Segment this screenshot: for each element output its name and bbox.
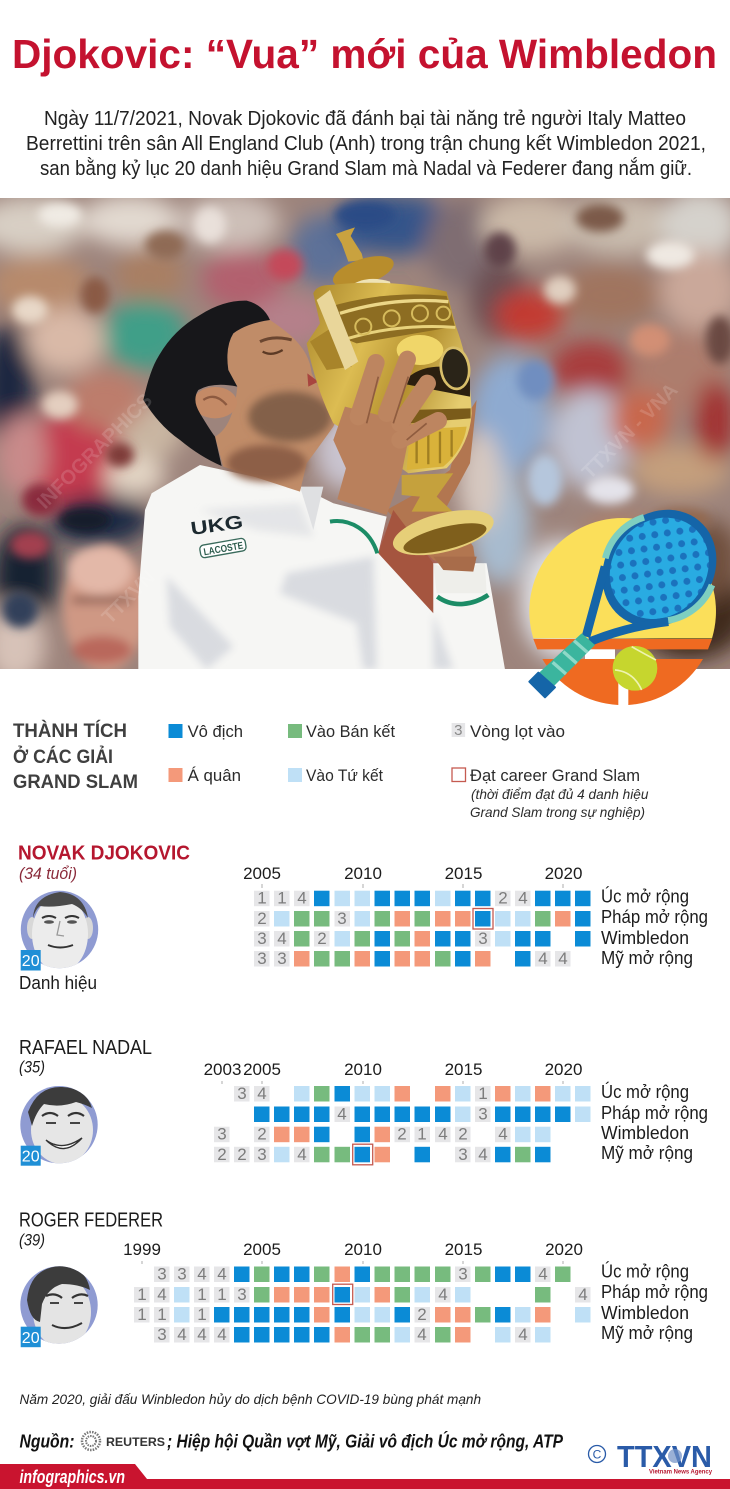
- results grid: [254, 889, 590, 968]
- intro text: Berrettini trên sân All England Club (Anh) trong trận chung kết Wimbledon 2021,: [26, 133, 706, 155]
- year axis: [243, 864, 582, 888]
- portrait: 20: [22, 953, 40, 970]
- tournament labels: Pháp mở rộng: [601, 907, 708, 927]
- results grid: 2: [257, 909, 267, 928]
- results grid: 3: [478, 929, 488, 948]
- results grid: 2: [458, 1125, 468, 1144]
- results grid: 1: [257, 889, 267, 908]
- legend item: champion: Vô địch: [188, 722, 243, 741]
- portrait: 20: [22, 1330, 40, 1347]
- results grid: 2: [317, 929, 327, 948]
- age: (35): [19, 1058, 45, 1077]
- year axis: 1999: [123, 1240, 161, 1259]
- results grid: 1: [217, 1285, 227, 1304]
- stubble: [227, 392, 332, 482]
- legend item: semifinal: Vào Bán kết: [306, 722, 395, 741]
- year axis: 2005: [243, 864, 281, 883]
- results grid: 3: [237, 1285, 247, 1304]
- legend heading: Ở CÁC GIẢI: [13, 746, 113, 768]
- results grid: 1: [197, 1305, 207, 1324]
- player and trophy: [138, 227, 505, 669]
- results grid: 4: [478, 1145, 488, 1164]
- panel: Rafael Nadal: [19, 1037, 708, 1166]
- results grid: 1: [137, 1305, 147, 1324]
- year axis: 2010: [344, 864, 382, 883]
- legend item: career grand slam: Đạt career Grand Slam: [470, 766, 640, 785]
- tournament labels: Wimbledon: [601, 928, 689, 948]
- icon: Reuters logo: [82, 1432, 100, 1450]
- year axis: 2020: [545, 864, 582, 883]
- results grid: 4: [578, 1285, 588, 1304]
- results grid: 3: [237, 1084, 247, 1103]
- watermarks: INFOGRAPHICS: [33, 390, 157, 514]
- results grid: 3: [177, 1264, 187, 1284]
- results grid: 2: [397, 1125, 407, 1144]
- career grand slam marker: [333, 1284, 353, 1304]
- year axis: 2010: [344, 1060, 382, 1079]
- name: NOVAK DJOKOVIC: [18, 842, 190, 864]
- results grid: [134, 1264, 590, 1344]
- tournament labels: [601, 886, 708, 968]
- results grid: 1: [157, 1305, 167, 1324]
- year axis: 2005: [243, 1240, 281, 1259]
- legend item: career grand slam: Grand Slam trong sự nghiệp): [470, 804, 645, 820]
- legend item: round reached: 3: [454, 722, 462, 739]
- jacket sponsor marks: UKG: [189, 511, 244, 539]
- year axis: 2005: [243, 1060, 281, 1079]
- year axis: 2010: [344, 1240, 382, 1259]
- portrait: [20, 1266, 100, 1348]
- legend heading: THÀNH TÍCH: [13, 720, 127, 742]
- source line: Nguồn:: [20, 1432, 74, 1452]
- portrait: 20: [22, 1148, 40, 1166]
- year axis: 2015: [445, 864, 482, 883]
- results grid: 1: [197, 1285, 207, 1304]
- footer bar: infographics.vn: [20, 1467, 125, 1487]
- ear: [193, 387, 237, 418]
- year axis: 2015: [445, 1060, 482, 1079]
- tournament labels: Wimbledon: [601, 1303, 689, 1323]
- intro text: san bằng kỷ lục 20 danh hiệu Grand Slam mà Nadal và Federer đang nắm giữ.: [40, 157, 692, 180]
- results grid: 3: [337, 909, 347, 928]
- intro text: [26, 108, 706, 180]
- results grid: 4: [257, 1084, 267, 1103]
- results grid: 3: [458, 1145, 468, 1164]
- results grid: 2: [417, 1305, 427, 1324]
- results grid: 1: [137, 1285, 147, 1304]
- results grid: 4: [438, 1285, 448, 1304]
- icon: tennis racket and ball on sun: [529, 487, 730, 705]
- results grid: 4: [538, 949, 548, 968]
- source line: [20, 1430, 564, 1452]
- results grid: 4: [297, 889, 307, 908]
- near hand: [333, 359, 438, 515]
- source line: REUTERS: [106, 1435, 165, 1449]
- hair: [143, 301, 270, 466]
- results grid: [214, 1084, 590, 1164]
- legend item: career grand slam: [452, 766, 649, 820]
- results grid: 4: [538, 1264, 548, 1284]
- crowd detail layer: [2, 201, 730, 672]
- age: (34 tuổi): [19, 864, 77, 883]
- tournament labels: [601, 1261, 708, 1343]
- intro text: Ngày 11/7/2021, Novak Djokovic đã đánh bại tài năng trẻ người Italy Matteo: [44, 108, 686, 130]
- results grid: 4: [217, 1264, 227, 1284]
- white jacket: [138, 465, 505, 669]
- legend item: runner-up: Á quân: [188, 766, 241, 785]
- watermarks: TTXVN: [98, 567, 160, 629]
- career grand slam marker: [473, 908, 493, 929]
- year axis: [204, 1060, 582, 1084]
- results grid: 1: [417, 1125, 427, 1144]
- blurred older spectator: [63, 544, 147, 672]
- watermarks: [33, 379, 682, 629]
- results grid: 3: [257, 929, 267, 948]
- results grid: 1: [277, 889, 287, 908]
- results grid: 4: [438, 1125, 448, 1144]
- title: Djokovic: “Vua” mới của Wimbledon: [12, 31, 717, 77]
- results grid: 3: [257, 949, 267, 968]
- logo: TTXVN: Vietnam News Agency: [649, 1470, 713, 1476]
- tournament labels: Mỹ mở rộng: [601, 1143, 693, 1163]
- results grid: 4: [197, 1264, 207, 1284]
- results grid: 3: [478, 1104, 488, 1124]
- year axis: 2003: [204, 1060, 241, 1079]
- tournament labels: Úc mở rộng: [601, 1261, 689, 1282]
- results grid: 4: [217, 1325, 227, 1344]
- far forearm and hand behind trophy: [387, 400, 477, 572]
- results grid: 4: [177, 1325, 187, 1344]
- caption: Danh hiệu: [19, 973, 97, 993]
- results grid: 4: [297, 1145, 307, 1164]
- legend heading: [13, 720, 138, 793]
- results grid: 2: [498, 889, 508, 908]
- portrait: [20, 1085, 100, 1166]
- footnote: Năm 2020, giải đấu Winbledon hủy do dịch bệnh COVID-19 bùng phát mạnh: [20, 1391, 481, 1407]
- legend item: career grand slam: (thời điểm đạt đủ 4 danh hiệu: [471, 786, 649, 802]
- portrait: [20, 890, 100, 972]
- results grid: 3: [157, 1264, 167, 1284]
- tournament labels: Mỹ mở rộng: [601, 948, 693, 968]
- results grid: 3: [458, 1264, 468, 1284]
- tournament labels: Pháp mở rộng: [601, 1103, 708, 1123]
- name: ROGER FEDERER: [19, 1210, 163, 1232]
- results grid: 3: [157, 1325, 167, 1344]
- tournament labels: Mỹ mở rộng: [601, 1323, 693, 1343]
- results grid: 4: [157, 1285, 167, 1304]
- tournament labels: Úc mở rộng: [601, 1081, 689, 1102]
- year axis: 2015: [445, 1240, 482, 1259]
- results grid: 4: [558, 949, 568, 968]
- results grid: 4: [518, 1325, 528, 1344]
- legend: [168, 722, 649, 820]
- career grand slam marker: [353, 1144, 373, 1165]
- panel: Novak Djokovic: [18, 842, 708, 993]
- results grid: 4: [498, 1125, 508, 1144]
- legend heading: GRAND SLAM: [13, 772, 138, 793]
- tournament labels: [601, 1081, 708, 1163]
- results grid: 4: [518, 889, 528, 908]
- footer bar: [0, 1464, 730, 1489]
- logo: TTXVN: TTXVN: [617, 1439, 712, 1474]
- hero photo: Djokovic kissing the Wimbledon trophy: [0, 190, 730, 685]
- results grid: 3: [257, 1145, 267, 1164]
- results grid: 4: [337, 1104, 347, 1124]
- player and trophy: LACOSTE: [203, 541, 244, 558]
- year axis: 2020: [545, 1240, 583, 1259]
- results grid: 3: [277, 949, 287, 968]
- results grid: 4: [277, 929, 287, 948]
- results grid: 3: [217, 1125, 227, 1144]
- source line: ; Hiệp hội Quần vợt Mỹ, Giải vô địch Úc mở rộng, ATP: [167, 1430, 564, 1452]
- results grid: 2: [257, 1125, 267, 1144]
- trophy: [307, 227, 498, 564]
- age: (39): [19, 1231, 45, 1250]
- legend item: round reached: Vòng lọt vào: [470, 722, 565, 741]
- tournament labels: Wimbledon: [601, 1123, 689, 1143]
- results grid: 4: [417, 1325, 427, 1344]
- face and neck: [215, 320, 335, 492]
- year axis: [123, 1240, 583, 1264]
- results grid: 1: [478, 1084, 488, 1103]
- name: RAFAEL NADAL: [19, 1037, 152, 1059]
- legend item: quarterfinal: Vào Tứ kết: [306, 766, 383, 785]
- tournament labels: Pháp mở rộng: [601, 1282, 708, 1302]
- logo: TTXVN: C: [593, 1448, 602, 1462]
- panel: Roger Federer: [19, 1210, 708, 1348]
- watermarks: TTXVN - VNA: [578, 379, 682, 484]
- results grid: 4: [197, 1325, 207, 1344]
- year axis: 2020: [545, 1060, 582, 1079]
- results grid: 2: [217, 1145, 227, 1164]
- results grid: 2: [237, 1145, 247, 1164]
- tournament labels: Úc mở rộng: [601, 886, 689, 907]
